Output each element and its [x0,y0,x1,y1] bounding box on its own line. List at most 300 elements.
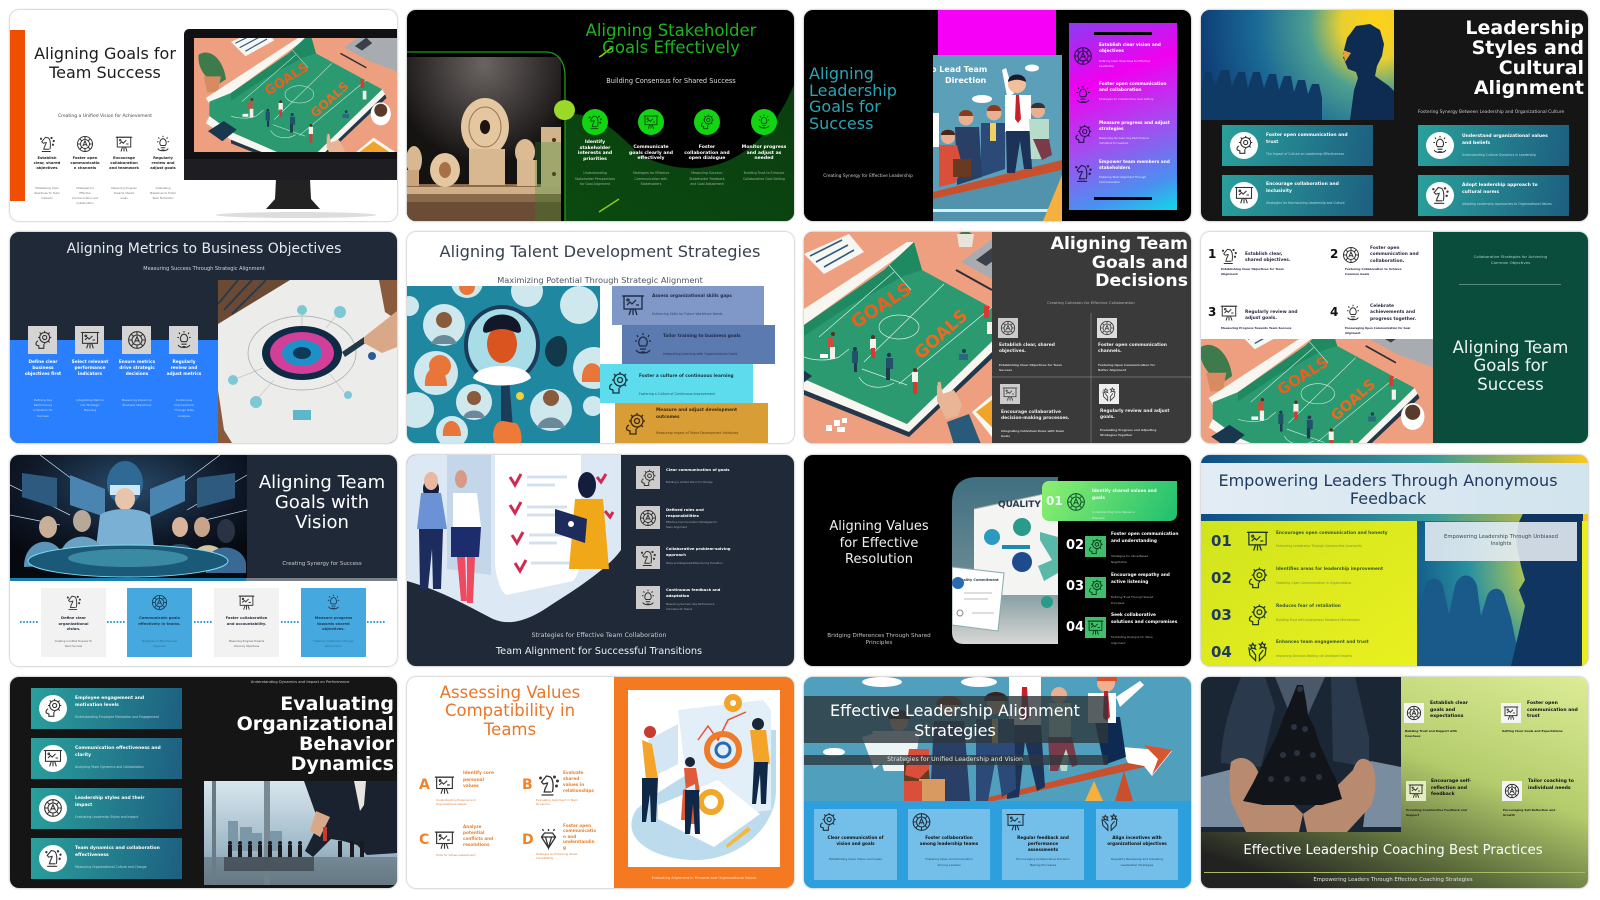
practice 2: trust [1527,714,1540,719]
slide: Aligning Stakeholder Goals Effectively [407,10,794,221]
card 2 [908,809,990,880]
metric 2: into Strategic [80,403,100,407]
step 4: review and [152,161,174,165]
item 01: 01 [1211,532,1232,550]
item 2: responsibilities [666,513,699,518]
subtitle: Principles [866,640,892,646]
item 3: adjust goals. [1245,316,1277,321]
slide: Aligning Team Goals and Decisions [804,232,1191,443]
item 03: Encourage empathy and [1111,573,1170,578]
step 3: Stakeholder Feedback [689,177,725,181]
title [237,694,394,774]
card 2: Foster collaboration [925,835,973,840]
title: Compatibility in [445,701,575,720]
metric 1 [25,326,61,418]
step 3: Visionary Objectives [234,645,259,648]
step 4: towards shared [317,622,350,626]
step 3 [684,109,730,186]
item 1: Clear communication of goals [666,467,730,472]
title: Aligning Talent Development Strategies [440,242,760,261]
item 4: adaptation [666,593,689,598]
item 02: Fostering Open Communication in Organizations [1276,581,1351,585]
step 4: Shared Vision [325,645,342,648]
title [440,684,580,739]
strategy card 4: Measure and adjust development [656,408,737,413]
metric 3: Measuring Impact on [122,398,152,402]
practice 1: Building Trust and Rapport with [1405,729,1457,733]
highlighted item 01: Identify shared values and [1092,489,1157,494]
card 2 [31,738,182,779]
item D: D [522,832,534,848]
practice 4 [1502,779,1587,819]
metric 2: Integrating Metrics [76,398,104,402]
step 2: n channels [74,166,96,170]
step 1: clear, shared [34,161,60,165]
item 1: Establish clear, [1245,252,1282,257]
card 2: Among Leaders [937,863,961,867]
green rounded frame line [407,51,566,221]
item 4: Measuring Success: Key Performance [666,603,714,606]
image: quality certificates [952,477,1058,644]
quadrant 2: Fostering Open Communication for [1098,363,1155,367]
item 4: progress together. [1370,317,1416,322]
card 3: impact [75,803,92,808]
metric 2: Planning [84,408,96,412]
item 3: Measuring Success: Key Performance [1099,136,1149,140]
subtitle: Collaborative Strategies for Achieving [1474,254,1547,259]
step 1: Team Success [65,645,82,648]
divider [1459,284,1561,285]
card 2: Understand organizational values [1462,134,1548,139]
item B: shared [563,776,579,781]
card 3: Encourage collaboration and [1266,182,1339,187]
item 03 [1065,573,1190,606]
item B [522,770,607,810]
title: Success [1477,375,1544,394]
image: quality certificates: Quality Commitment [958,578,999,582]
item 4 [1330,304,1416,335]
step 1 [41,588,106,657]
item D: understandin [563,839,595,844]
image: executive moving figures by a skyline window [204,781,397,885]
image: team on a seesaw [933,55,1062,221]
title [830,701,1080,741]
item D [522,823,607,861]
item 1: Establishing Clear Objectives for Team [1221,267,1284,271]
item 02: and understanding [1111,539,1157,544]
practice 2: Setting Clear Goals and Expectations [1502,729,1563,733]
card 3: assessments [1028,847,1058,852]
title: Aligning Team [259,472,385,493]
title [1218,472,1558,509]
item 2: Defined roles and [666,507,704,512]
item C: conflicts and [463,836,493,841]
subtitle: Maximizing Potential Through Strategic Alignment [497,275,703,285]
item 3 [636,546,781,570]
slide: Aligning Metrics to Business Objectives [10,232,397,443]
quadrant 1: Establishing Clear Objectives for Team [999,363,1062,367]
image: silhouetted speaker and crowd [1201,10,1394,120]
practice 2: communication and [1527,708,1578,713]
item B: values in [563,782,584,787]
step 3: Foster collaboration [226,616,267,620]
card 1: Understanding Employee Motivation and Engagement [75,715,159,719]
item 3: Indicators for Leaders [1099,141,1128,145]
subtitle: Building Consensus for Shared Success [606,77,736,85]
metric 4: Through Data [174,408,194,412]
step 4: and adjust as [747,151,781,156]
card 2: among leadership teams [920,841,978,846]
step 2: Communicate [633,145,669,150]
quadrant 2: Better Alignment [1098,368,1126,372]
item 1: shared objectives. [1245,258,1290,263]
title: Team Success [49,63,161,82]
step 1: vision. [67,627,80,631]
practice 4: Tailor coaching to [1528,779,1574,784]
subtitle band [804,755,1108,765]
lime badge [554,100,575,120]
subtitle: Strategies for Unified Leadership and Vision [887,756,1023,763]
step 2: Strategies for Effective Goal [142,640,177,643]
dark title panel [247,455,397,578]
step 4: Monitor progress [742,145,786,150]
title: Strategies [914,721,996,740]
metric 3: drive strategic [119,366,155,371]
item 04: Facilitating Dialogue for Value [1111,635,1153,639]
card 1 [31,688,182,729]
metric 4 [166,326,202,418]
item 4: achievements and [1370,310,1415,315]
step 1: Creating a Unified Purpose for [55,640,92,643]
practice 3 [1406,779,1498,819]
card 4: Team dynamics and collaboration [75,846,160,851]
step 1: Identify [585,140,605,145]
item 2: and collaboration [1099,88,1141,93]
title: Aligning Goals for [34,44,176,63]
image: monitor with football-field goals board [184,29,397,218]
title: Styles and [1472,37,1584,59]
image: monitor with football-field goals board: GOALS [262,60,312,99]
practice 4: Growth [1503,813,1515,817]
item 1 [1208,247,1290,276]
title: Vision [295,512,349,533]
step 4: Celebrating [155,187,171,190]
practice 4: individual needs [1528,786,1571,791]
item 3: strategies [1099,127,1124,132]
metric 4: review and [171,366,197,371]
quadrant 3 [1000,384,1069,438]
step 1: organizational [59,622,88,626]
item A: Organizational Values [436,802,466,806]
subtitle: Empowering Leaders Through Effective Coaching Strategies [1313,877,1473,883]
practice 1 [1404,701,1496,741]
card 4: Align incentives with [1112,835,1162,840]
item 2: Fostering Collaboration to Achieve [1345,267,1402,271]
title band [804,696,1108,743]
highlighted item 01: goals [1092,496,1105,501]
step 2 [629,109,673,186]
item D: n and [563,834,576,839]
metric 1: business [32,366,54,371]
metric 2 [72,326,108,412]
metric 3: decisions [126,372,148,377]
title: Alignment [1474,77,1584,99]
title: Teams [484,720,536,739]
metric 1: Indicators for [33,408,53,412]
subtitle: Creating a Unified Vision for Achievement [58,114,152,119]
quadrant 4: Strategies Together [1100,433,1132,437]
step 4: objectives. [322,627,345,631]
card 3 [31,788,182,829]
item 2 [1076,82,1166,103]
step 3: Measuring Success: [691,171,723,175]
step 2: Communicate goals [139,616,180,620]
step 3: and Goal Adjustment [690,182,724,186]
step 1 [34,136,60,200]
card 1: Foster open communication and [1266,133,1348,138]
practice 2 [1501,701,1587,741]
header band [1201,463,1588,514]
item 03: 03 [1066,579,1084,594]
card 3: Making Processes [1030,863,1056,867]
card 1: motivation levels [75,703,119,708]
title: Goals with [275,492,369,513]
strategy card 4: Measuring Impact of Talent Development Initiatives [656,431,738,435]
item 2: collaboration. [1370,259,1404,264]
title [34,44,176,82]
title: Empowering Leaders Through Anonymous [1218,471,1558,490]
quadrant 1: objectives. [999,349,1026,354]
slide: Aligning Team Goals with Vision [10,455,397,666]
image: team reviewing checklist [407,455,621,625]
item D: Foster open [563,823,591,828]
callout: Empowering Leadership Through Unbiased [1444,534,1558,540]
strategy card 4 [615,403,768,443]
dotted connectors [10,620,397,624]
strategy card 2 [622,325,775,364]
card 4: Adopt leadership approach to [1462,183,1538,188]
card 3: Regular feedback and [1017,835,1069,840]
metric 1: Defining Key [34,398,52,402]
step 1: Establishing Clear [35,187,59,190]
subtitle [1433,254,1588,265]
item B: Evaluate [563,770,584,775]
item 01: Enhancing Leadership Through Constructive Anonymity [1276,544,1362,548]
card 4: effectiveness [75,853,109,858]
callout [1425,522,1577,561]
title [259,473,385,533]
green wave background [566,85,794,221]
item A: A [419,777,430,793]
step 1: Objectives for Team [34,192,60,195]
highlighted item 01: Disputes [1092,516,1105,520]
card 1: Establishing Clear Vision and Goals [829,857,882,861]
item 4: Continuous feedback and [666,587,720,592]
step 4 [301,588,366,657]
item 04: solutions and compromises [1111,620,1177,625]
item 03: Building Trust with Anonymous Feedback Mechanisms [1276,618,1360,622]
title: Aligning Stakeholder [586,21,756,40]
step 1: priorities [583,157,607,162]
metric 4: Regularly [172,360,196,365]
metric 1: Define clear [28,360,58,365]
item C: resolutions [463,842,489,847]
quadrant 3: Goals [1001,434,1010,438]
title [809,64,897,133]
step 2: Communication and [72,197,98,200]
card 4 [1418,175,1569,216]
blue card band [804,801,1191,888]
subtitle: Creating Synergy for Success [282,561,362,567]
item 3 [1208,305,1298,330]
subtitle: Measuring Success Through Strategic Alignment [143,266,265,272]
card 3: Evaluating Leadership Styles and Impact [75,815,138,819]
title: Goals for [809,97,881,116]
card 4: Leadership Strategies [1121,863,1153,867]
metric 2: performance [75,366,105,371]
metric 1: Success [37,414,49,418]
step 4: Building Trust to Enhance [744,171,784,175]
card 2: Communication effectiveness and [75,746,161,751]
item 02: Foster open communication [1111,532,1178,537]
item 03: Principles [1111,601,1124,605]
item 2: Foster open [1370,246,1399,251]
quadrant 4: Regularly review and adjust [1100,409,1169,414]
title: Effective Leadership Alignment [830,701,1080,720]
step 4: Fostering Collaboration Through [313,640,354,643]
card 4: cultural norms [1462,190,1499,195]
caption: Evaluating Alignment in Personal and Organizational Values [652,876,756,880]
squiggle accents [598,48,620,212]
title: Goals and [1092,253,1188,273]
slide: Empowering Leaders Through Anonymous Feedback [1201,455,1588,666]
item 3 [1076,120,1170,145]
item 3: Collaborative problem-solving [666,546,731,551]
step 4: Measure progress [315,616,352,620]
item 1: Leadership [1099,64,1114,68]
strategy card 1 [612,286,764,325]
title: Aligning [809,64,874,83]
slide: Aligning Talent Development Strategies [407,232,794,443]
strategy card 4: outcomes [656,415,680,420]
title: Effective Leadership Coaching Best Practices [1243,843,1543,858]
card 4 [1096,809,1178,880]
item C: potential [463,830,484,835]
slide: Team Alignment for Successful Transitions [407,455,794,666]
subtitle: Understanding Dynamics and Impact on Performance [251,680,349,684]
strategy card 1: Enhancing Skills for Future Workforce Needs [652,312,723,316]
card 1: Employee engagement and [75,696,144,701]
card 3 [1002,809,1084,880]
quadrant 1: Establish clear, shared [999,343,1055,348]
title: Aligning Metrics to Business Objectives [67,241,341,257]
item 4: Encouraging Open Communication for Goal [1345,326,1410,330]
item D: g [563,845,566,850]
step 2: Effective [79,192,91,195]
step 2: Collaboration [76,202,94,205]
image: futuristic team at holographic table [10,455,247,578]
slide: Effective Leadership Coaching Best Practices [1201,677,1588,888]
step 4 [742,109,786,181]
item A [419,771,504,809]
step 2 [70,136,100,205]
card 4: Measuring Organizational Culture and Change [75,865,146,869]
quadrant 3: Encourage collaborative [1001,410,1061,415]
item 02: 02 [1066,538,1084,553]
image: football field goals board [1201,339,1433,443]
metric 4: Improvement [174,403,194,407]
step 2: communicatio [70,161,100,165]
slide: Aligning Leadership Goals for Success [804,10,1191,221]
step 1: interests and [578,151,612,156]
step 3: collaboration and [684,151,730,156]
blue lower band [10,340,397,443]
quadrant 3: Integrating Individual Roles with Team [1001,429,1064,433]
image: football field goals board: GOALS [911,306,972,364]
metric 1: objectives first [25,372,61,377]
title: Aligning Values [829,519,929,534]
item 4: stakeholders [1099,166,1130,171]
item 3: Roles and Responsibilities During Transition [666,562,722,565]
step 2: Communication with [635,177,667,181]
highlighted item 01 [1042,481,1177,521]
step 2: effectively [637,156,665,161]
item 4: Celebrate [1370,304,1394,309]
item 1: Alignment [1221,272,1238,276]
step 3: and accountability. [227,622,266,626]
title: Resolution [845,552,913,567]
quadrant 4 [1099,384,1170,437]
magenta block [938,10,1056,56]
step 1: objectives [36,166,58,170]
slide: Aligning Values for Effective Resolution [804,455,1191,666]
orange accent bar [10,30,25,201]
item 4 [1075,160,1170,184]
step 3: open dialogue [689,156,725,161]
step 2: Alignment [153,645,166,648]
item 01: Encourages open communication and honesty [1276,531,1388,536]
metric 3 [119,326,155,407]
subtitle: Bridging Differences Through Shared [827,633,931,639]
step 1: Establish [38,156,56,160]
title: Aligning Team [1051,234,1188,254]
step 2: effectively in teams. [138,622,181,626]
quadrant 4: Evaluating Progress and Adjusting [1100,428,1156,432]
slide: Evaluating Organizational Behavior Dynamics [10,677,397,888]
step 3 [109,136,139,200]
title [1433,339,1588,394]
title: for Effective [840,536,918,551]
subtitle: Common Objectives [1491,260,1530,265]
item D: Strategies for Enhancing Values [536,853,577,856]
card 2 [1418,125,1569,166]
strategy card 1: Assess organizational skills gaps [652,294,732,299]
item 04 [1065,613,1190,646]
image: team on seesaw with arrow [804,677,1191,801]
quadrant 2: channels. [1098,349,1122,354]
practice 3: Providing Constructive Feedback and [1406,808,1467,812]
practice 3: reflection and [1431,786,1467,791]
card 4: Regularly Reviewing and Adjusting [1111,857,1163,861]
strategy card 3: Foster a culture of continuous learning [639,374,734,379]
step 1: Understanding [583,171,607,175]
bottom bar [1094,197,1152,200]
title: Organizational [237,713,394,735]
metric 3: Ensure metrics [119,360,155,365]
quadrant 2: Foster open communication [1098,343,1167,348]
title [1050,234,1188,291]
strategy card 3: Fostering a Culture of Continuous Improvement [639,392,715,396]
